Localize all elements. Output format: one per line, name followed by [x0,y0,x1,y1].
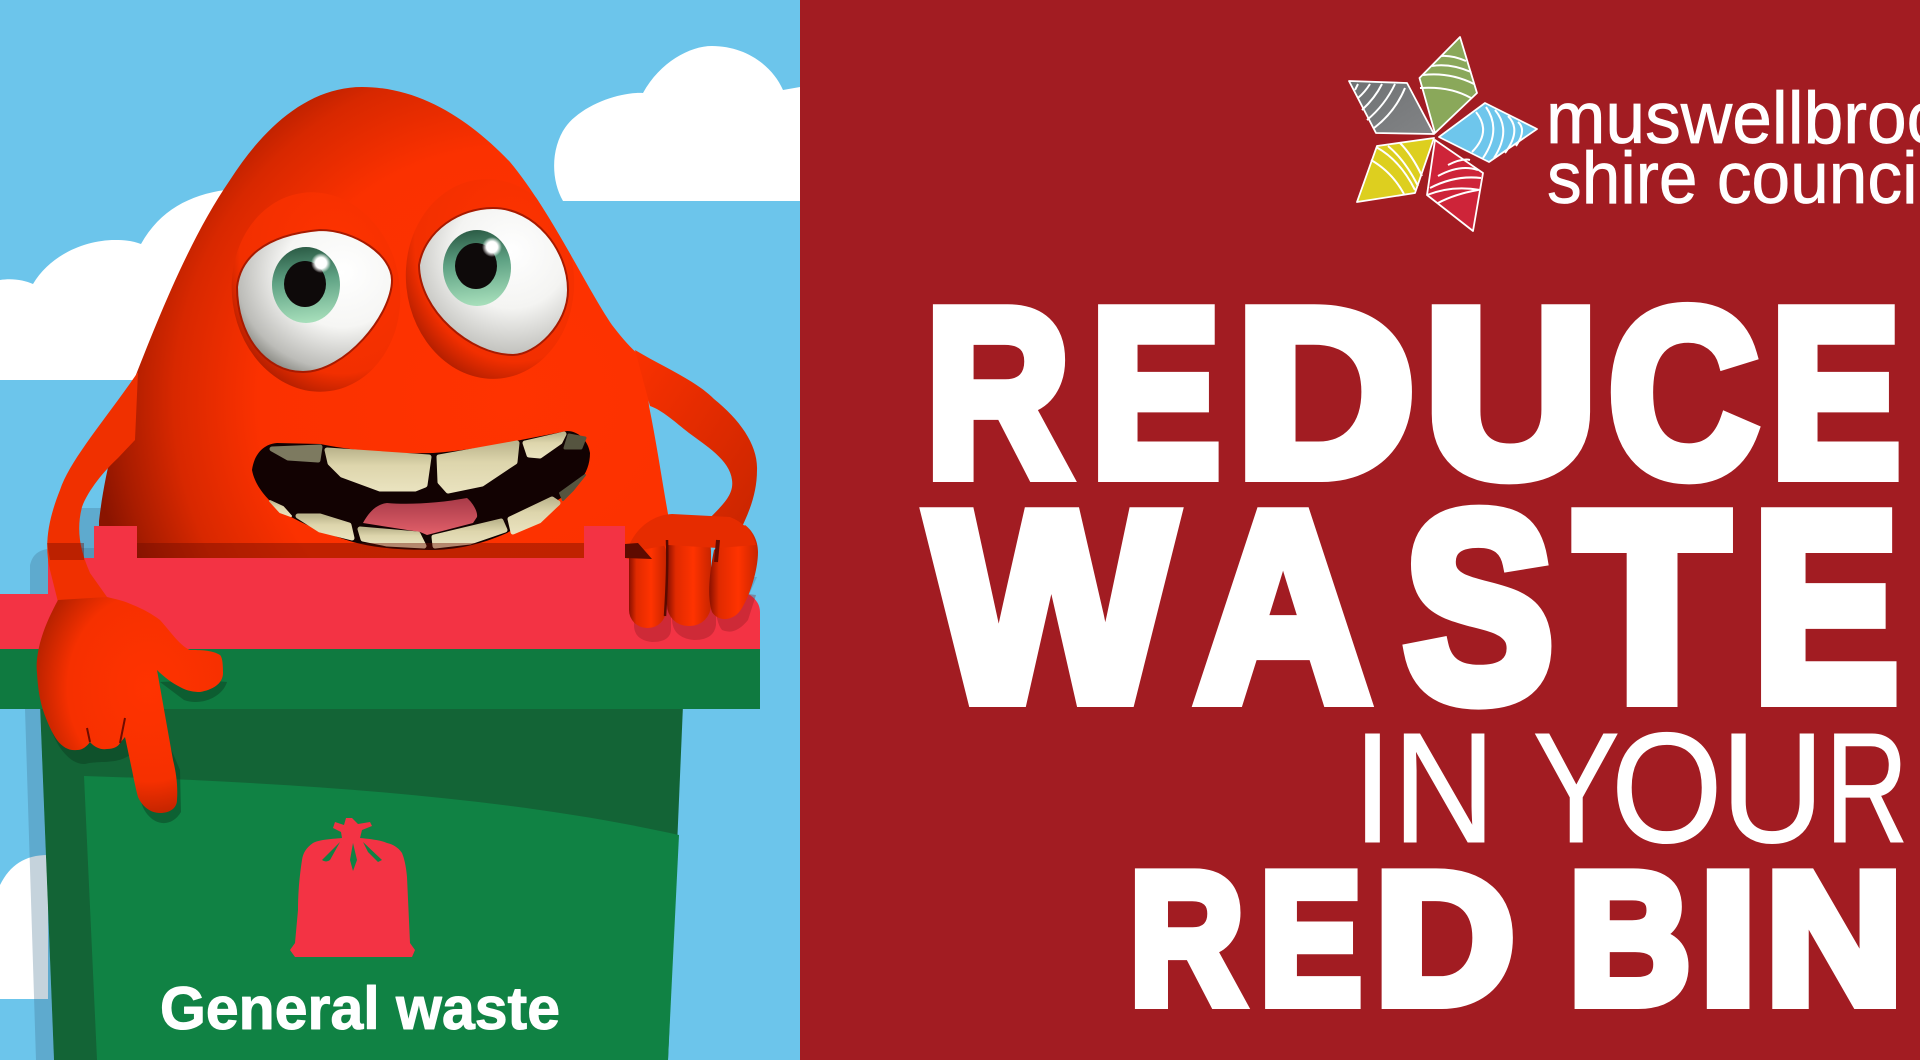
monster right arm [635,350,757,535]
headline: WASTE: W [929,457,1176,756]
headline: REDUCE: U [1424,261,1598,526]
headline: REDUCE: D [1236,261,1415,526]
headline: IN YOUR: I [1352,701,1393,876]
left eye [232,192,398,392]
headline: IN YOUR: Y [1533,701,1620,876]
tongue [363,498,477,535]
bin lid [0,526,760,649]
right eye [406,196,572,379]
headline: WASTE: A [1196,457,1370,756]
headline [925,261,1908,1043]
logo: Muswellbrook Shire Council [1349,37,1920,231]
knuckles [627,514,756,552]
headline: REDUCE: R [925,261,1070,526]
finger 2 [667,530,711,626]
headline: RED BIN: R [1129,834,1244,1043]
bin body dark [40,705,683,1060]
teeth [270,434,585,546]
headline: IN YOUR: U [1721,701,1824,876]
panel: sky background [0,0,800,1060]
bin shadow [25,508,757,1060]
finger 1 [629,535,666,628]
headline: RED BIN: E [1260,834,1362,1043]
headline: IN YOUR: N [1393,701,1496,876]
headline: RED BIN: I [1700,834,1757,1043]
monster hand shadows [50,575,756,823]
monster left arm and pointing hand [37,372,223,813]
finger 3 [709,525,758,619]
headline: WASTE: S [1404,457,1554,756]
headline: WASTE: T [1576,457,1728,756]
logo star [1349,37,1537,231]
bin rim [0,649,760,709]
headline: RED BIN: N [1766,834,1903,1043]
headline: REDUCE: E [1091,261,1220,526]
panel: red headline background [800,0,1920,1060]
mouth [252,431,590,550]
monster body [99,87,674,570]
headline: RED BIN: B [1569,834,1691,1043]
bin front panel [84,776,679,1060]
character: red monster [99,87,757,570]
label: General waste: General waste [160,975,560,1042]
headline: IN YOUR: O [1611,701,1723,876]
lid shadow on monster [137,543,584,558]
clouds [0,46,800,999]
headline: REDUCE: C [1608,261,1758,526]
headline: RED BIN: D [1375,834,1515,1043]
icon: rubbish bag [290,818,415,957]
logo wordmark [1546,78,1920,219]
monster right hand [625,514,758,628]
